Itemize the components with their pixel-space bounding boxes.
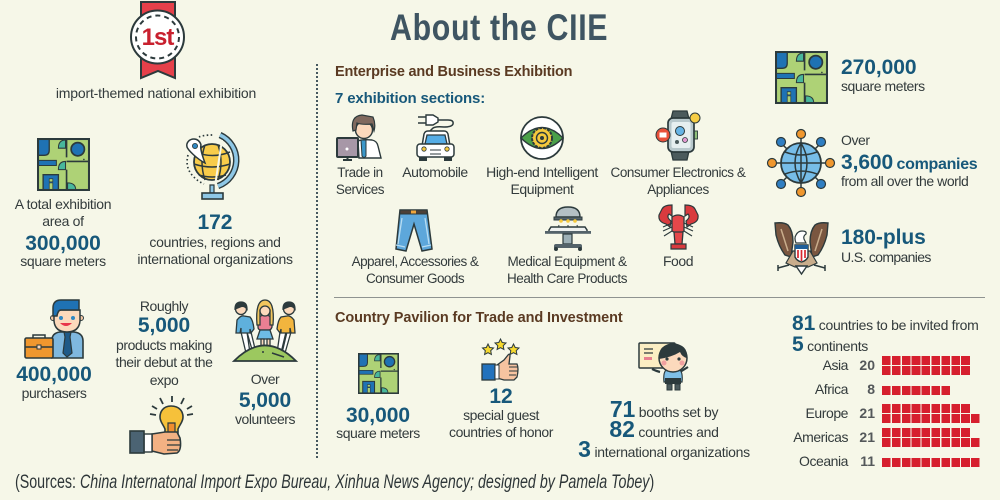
- stat: 270,000 square meters: square meters: [841, 78, 925, 94]
- icon: purchaser with briefcase: [24, 299, 84, 359]
- label: consumer electronics and appliances: Appliances: [647, 182, 709, 197]
- stat: 180-plus U.S. companies: 180-plus: [841, 226, 926, 249]
- icon: trade in services: [336, 114, 382, 161]
- label: consumer electronics and appliances: Consumer Electronics &: [611, 165, 745, 180]
- row: Europe: Europe: [806, 405, 848, 421]
- stat: 5,000 debut products: their debut at the: [116, 354, 212, 370]
- stat: 180-plus U.S. companies: U.S. companies: [841, 249, 931, 265]
- stat: 3,600 companies: Over: [841, 132, 870, 148]
- row: Americas: [790, 428, 980, 448]
- icon: presenter at board: [638, 342, 688, 390]
- label: consumer electronics and appliances: [611, 165, 746, 197]
- label: trade in services: Services: [336, 182, 384, 197]
- label: trade in services: Trade in: [337, 165, 383, 180]
- icon: floor plan total area: [37, 138, 90, 191]
- stat: 12 guest countries: countries of honor: [449, 424, 553, 440]
- label: apparel, accessories and consumer goods: Apparel, Accessories &: [352, 254, 478, 269]
- icon: medical equipment: [545, 206, 591, 251]
- row: Oceania: [790, 453, 980, 470]
- row: Africa: [815, 381, 950, 397]
- stat: 172 countries: 172: [198, 211, 232, 234]
- label: food: Food: [663, 253, 693, 269]
- row: Europe: 21: [859, 405, 875, 421]
- stat: 30,000 square meters: [336, 404, 420, 441]
- stat: 12 guest countries: special guest: [463, 407, 539, 423]
- stat: 400,000 purchasers: 400,000: [16, 363, 92, 386]
- icon: lobster: [658, 204, 699, 250]
- icon: hand holding light bulb: [129, 396, 194, 455]
- stat: 5,000 debut products: [116, 298, 212, 388]
- stat: 270,000 square meters: [841, 56, 925, 94]
- stat: total exhibition area: [14, 196, 111, 269]
- row: Asia: 20: [859, 357, 875, 373]
- stat: 172 countries: [137, 211, 293, 267]
- icon: first place medal: [130, 1, 185, 80]
- stat: total exhibition area: A total exhibition: [15, 196, 111, 212]
- icon: smartwatch: [656, 110, 700, 161]
- stat: 172 countries: countries, regions and: [149, 234, 281, 250]
- label: high-end intelligent equipment: [486, 164, 598, 197]
- row: Asia: [822, 356, 970, 375]
- stat: 5,000 volunteers: Over volunteers: [235, 371, 295, 427]
- stat: total exhibition area: area of square meters: [20, 213, 106, 269]
- icon: three volunteers on hill: [232, 299, 298, 362]
- icon: first place medal: 1st: [142, 24, 174, 51]
- stat: 5,000 debut products: expo: [150, 372, 178, 388]
- icon: american eagle: [774, 222, 829, 276]
- stat: 5,000 volunteers: 5,000: [239, 389, 291, 412]
- stat: 172 countries: international organizations: [137, 251, 293, 267]
- subheading: 7 exhibition sections: 7 exhibition sections:: [335, 90, 485, 107]
- dotted divider: [316, 64, 318, 458]
- label: apparel, accessories and consumer goods: Consumer Goods: [366, 271, 464, 286]
- stat: 400,000 purchasers: purchasers: [22, 385, 86, 401]
- source line: (Sources: China Internatonal Import Expo Bureau, Xinhua News Agency; designed by Pamela Tobey): [15, 471, 654, 493]
- stat: countries invited from continents: 5 continents: [792, 333, 868, 356]
- text: import-themed national exhibition: import-themed national exhibition: [56, 85, 256, 101]
- heading: enterprise and business exhibition: Enterprise and Business Exhibition: [335, 64, 572, 80]
- icon: floor plan pavilion area: [358, 353, 399, 394]
- label: trade in services: [336, 165, 384, 197]
- stat: 30,000 square meters: 30,000: [346, 404, 410, 427]
- stat: 30,000 square meters: square meters: [336, 425, 420, 441]
- label: medical equipment and health care products: Health Care Products: [507, 271, 627, 286]
- icon: intelligent equipment eye: [520, 116, 564, 160]
- stat: 5,000 debut products: 5,000: [138, 314, 190, 337]
- title: About the CIIE: [390, 7, 608, 48]
- row: Europe: [806, 404, 980, 423]
- row: Americas: 21: [859, 429, 875, 445]
- stat: 5,000 debut products: Roughly products making: [116, 298, 212, 353]
- stat: booths, countries, organizations: [578, 396, 750, 462]
- stat: 3,600 companies: 3,600 companies: [841, 151, 977, 174]
- stat: 3,600 companies: [841, 132, 977, 189]
- row: Oceania: 11: [860, 453, 875, 469]
- row: Africa: Africa: [815, 381, 848, 397]
- stat: booths, countries, organizations: 71 booths set by: [610, 396, 718, 422]
- stat: 12 guest countries: 12: [489, 385, 513, 408]
- row: Africa: 8: [867, 381, 875, 397]
- heading: country pavilion: Country Pavilion for Trade and Investment: [335, 310, 623, 326]
- chart: invited countries by continent: [793, 356, 980, 469]
- label: automobile: Automobile: [402, 164, 468, 180]
- stat: countries invited from continents: 81 countries to be invited from: [792, 312, 978, 335]
- stat: 12 guest countries: [449, 385, 554, 440]
- label: high-end intelligent equipment: High-end Intelligent: [486, 164, 598, 180]
- label: high-end intelligent equipment: Equipment: [511, 181, 573, 197]
- stat: 400,000 purchasers: [16, 363, 92, 401]
- label: apparel, accessories and consumer goods: [352, 254, 479, 286]
- row: Asia: Asia: [823, 357, 848, 373]
- icon: thumbs up with stars: [481, 338, 520, 381]
- row: Americas: Americas: [793, 429, 848, 445]
- icon: global network: [766, 128, 836, 198]
- icon: floor plan exhibition area: [775, 51, 828, 104]
- stat: booths, countries, organizations: 3 international organizations: [578, 436, 750, 462]
- icon: jeans: [395, 209, 433, 252]
- label: medical equipment and health care products: [507, 254, 627, 286]
- icon: globe: [186, 132, 240, 200]
- stat: total exhibition area: 300,000: [25, 232, 101, 255]
- stat: countries invited from continents: [792, 312, 978, 356]
- stat: 270,000 square meters: 270,000: [841, 56, 917, 79]
- stat: 180-plus U.S. companies: [841, 226, 931, 265]
- stat: booths, countries, organizations: 82 countries and: [609, 416, 719, 442]
- label: medical equipment and health care products: Medical Equipment &: [507, 254, 626, 269]
- stat: 3,600 companies: from all over the world: [841, 173, 968, 189]
- row: Oceania: Oceania: [799, 453, 848, 469]
- icon: electric automobile: [416, 114, 455, 161]
- divider: [334, 297, 985, 298]
